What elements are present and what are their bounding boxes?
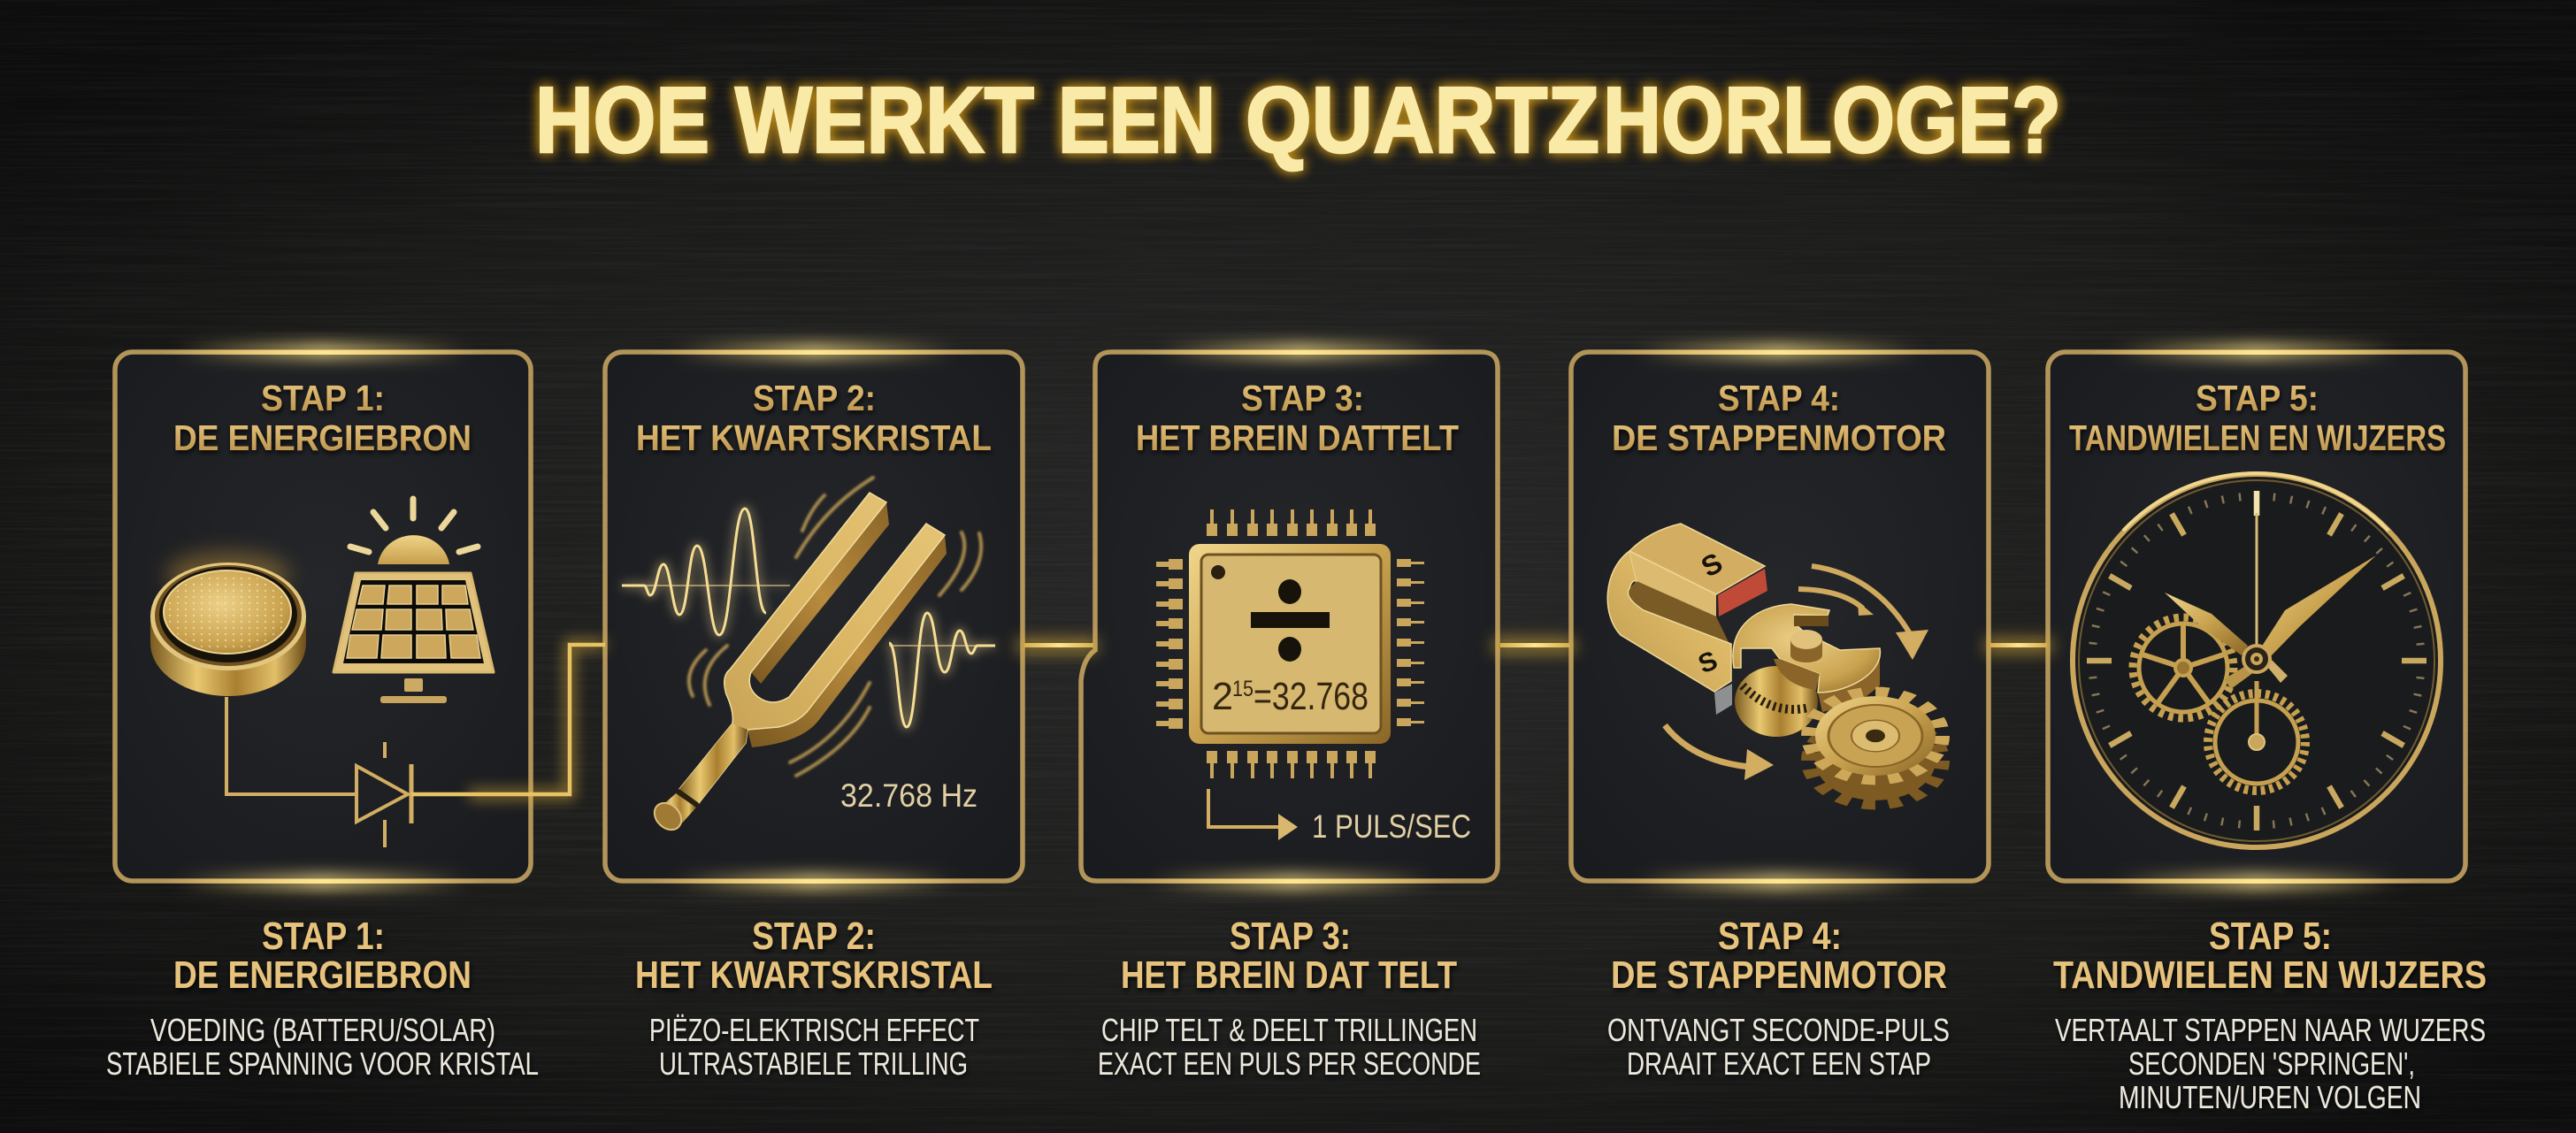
- arrow: verbinding stap 4 naar 5: [1985, 639, 2052, 653]
- caption: stap 2: PIËZO-ELEKTRISCH EFFECT: [649, 1012, 979, 1048]
- caption: stap 2: STAP 2:: [752, 915, 876, 958]
- arrow: verbinding stap 2 naar 3: [1017, 639, 1097, 653]
- caption: stap 1: STABIELE SPANNING VOOR KRISTAL: [106, 1045, 539, 1082]
- heading: HET BREIN DATTELT: [1136, 417, 1459, 458]
- icon: trillingsgolf: [622, 509, 995, 727]
- caption: stap 5: STAP 5:: [2209, 915, 2332, 958]
- formule: 2: [1212, 675, 1233, 718]
- heading: [636, 378, 992, 458]
- arrow: korte rotatie: [1798, 589, 1874, 616]
- caption: stap 2: [635, 915, 993, 1082]
- uurstreepjes: [2087, 491, 2426, 831]
- heading: STAP 1:: [261, 378, 385, 418]
- caption: stap 1: [106, 915, 539, 1082]
- title: HORLOGE?: [1603, 68, 2061, 172]
- icon: bewegingslijnen: [689, 478, 981, 776]
- formule: [1212, 675, 1368, 718]
- caption: stap 5: [2053, 915, 2487, 1115]
- heading: STAP 3:: [1241, 378, 1364, 418]
- panel: stap 1 de energiebron: [115, 345, 531, 888]
- icon: hoefijzermagneet: S: [1694, 646, 1721, 679]
- arrow: verbinding stap 3 naar 4: [1493, 639, 1575, 653]
- caption: stap 2: ULTRASTABIELE TRILLING: [659, 1045, 968, 1082]
- panel: stap 2 het kwartskristal: [605, 345, 1023, 888]
- chip pins: [1156, 509, 1424, 778]
- panel: stap 5 tandwielen en wijzers: [2048, 345, 2465, 888]
- caption: stap 1: STAP 1:: [262, 915, 385, 958]
- formule: =32.768: [1254, 675, 1368, 718]
- minuutwijzer: [2261, 555, 2376, 659]
- heading: [173, 378, 472, 458]
- heading: STAP 5:: [2196, 378, 2319, 418]
- arrow: onderste beweging: [1665, 725, 1774, 780]
- caption: stap 2: HET KWARTSKRISTAL: [635, 953, 993, 997]
- icon: tandwiel onder: [2208, 681, 2305, 791]
- arrow: puls uitgang: [1208, 789, 1298, 840]
- caption: stap 4: [1607, 915, 1950, 1082]
- title: QUARTZ: [1246, 68, 1599, 172]
- caption: stap 4: DRAAIT EXACT EEN STAP: [1627, 1045, 1931, 1082]
- caption: stap 3: HET BREIN DAT TELT: [1121, 953, 1457, 997]
- uurwijzer: [2165, 593, 2248, 655]
- caption: stap 3: STAP 3:: [1230, 915, 1351, 958]
- icon: rotor: [1733, 604, 1880, 737]
- heading: DE STAPPENMOTOR: [1612, 417, 1946, 458]
- heading: HET KWARTSKRISTAL: [636, 417, 992, 458]
- heading: [1612, 378, 1946, 458]
- heading: [1136, 378, 1459, 458]
- icon: diode circuit: [226, 697, 411, 847]
- secondewijzer: [2256, 513, 2258, 659]
- title: HOE: [535, 68, 709, 172]
- heading: TANDWIELEN EN WIJZERS: [2069, 417, 2446, 458]
- icon: hoefijzermagneet: S: [1696, 547, 1728, 583]
- caption: stap 5: TANDWIELEN EN WIJZERS: [2053, 953, 2487, 997]
- title: [535, 68, 2061, 172]
- caption: stap 5: SECONDEN 'SPRINGEN',: [2128, 1045, 2415, 1082]
- icon: knoopcel batterij: [150, 552, 306, 696]
- icon: tandwiel: [1810, 693, 1941, 804]
- formule: 15: [1232, 677, 1254, 701]
- caption: stap 4: STAP 4:: [1718, 915, 1842, 958]
- caption: stap 3: EXACT EEN PULS PER SECONDE: [1098, 1045, 1481, 1082]
- caption: stap 4: DE STAPPENMOTOR: [1611, 953, 1947, 997]
- heading: [2069, 378, 2446, 458]
- icon: zonnepaneel: [334, 499, 494, 703]
- caption: stap 3: CHIP TELT & DEELT TRILLINGEN: [1101, 1012, 1477, 1048]
- title: WERKT: [735, 68, 1034, 172]
- heading: DE ENERGIEBRON: [173, 417, 472, 458]
- label: frequentie: 32.768 Hz: [840, 777, 978, 814]
- caption: stap 3: [1098, 915, 1481, 1082]
- panel: stap 3 het brein dat telt: [1081, 345, 1498, 888]
- panel: stap 4 de stappenmotor: [1571, 345, 1989, 888]
- heading: STAP 2:: [753, 378, 876, 418]
- icon: wijzerplaat: [2073, 473, 2441, 847]
- icon: tandwiel links: [2133, 617, 2234, 718]
- arrow: lange rotatie: [1812, 566, 1928, 660]
- label: puls: 1 PULS/SEC: [1312, 808, 1471, 845]
- heading: STAP 4:: [1718, 378, 1840, 418]
- icon: stemvork: [649, 493, 947, 835]
- icon: wijzers: [2165, 513, 2376, 689]
- caption: stap 4: ONTVANGT SECONDE-PULS: [1607, 1012, 1950, 1048]
- icon: chip: [1156, 509, 1424, 778]
- caption: stap 5: MINUTEN/UREN VOLGEN: [2119, 1079, 2421, 1115]
- arrow: verbinding stap 1 naar 2: [411, 645, 605, 794]
- minuutstreepjes: [2092, 496, 2421, 825]
- deelteken: [1251, 579, 1330, 662]
- caption: stap 1: VOEDING (BATTERU/SOLAR): [150, 1012, 495, 1048]
- icon: hoefijzermagneet: [1607, 524, 1767, 715]
- caption: stap 1: DE ENERGIEBRON: [173, 953, 472, 997]
- title: EEN: [1058, 68, 1215, 172]
